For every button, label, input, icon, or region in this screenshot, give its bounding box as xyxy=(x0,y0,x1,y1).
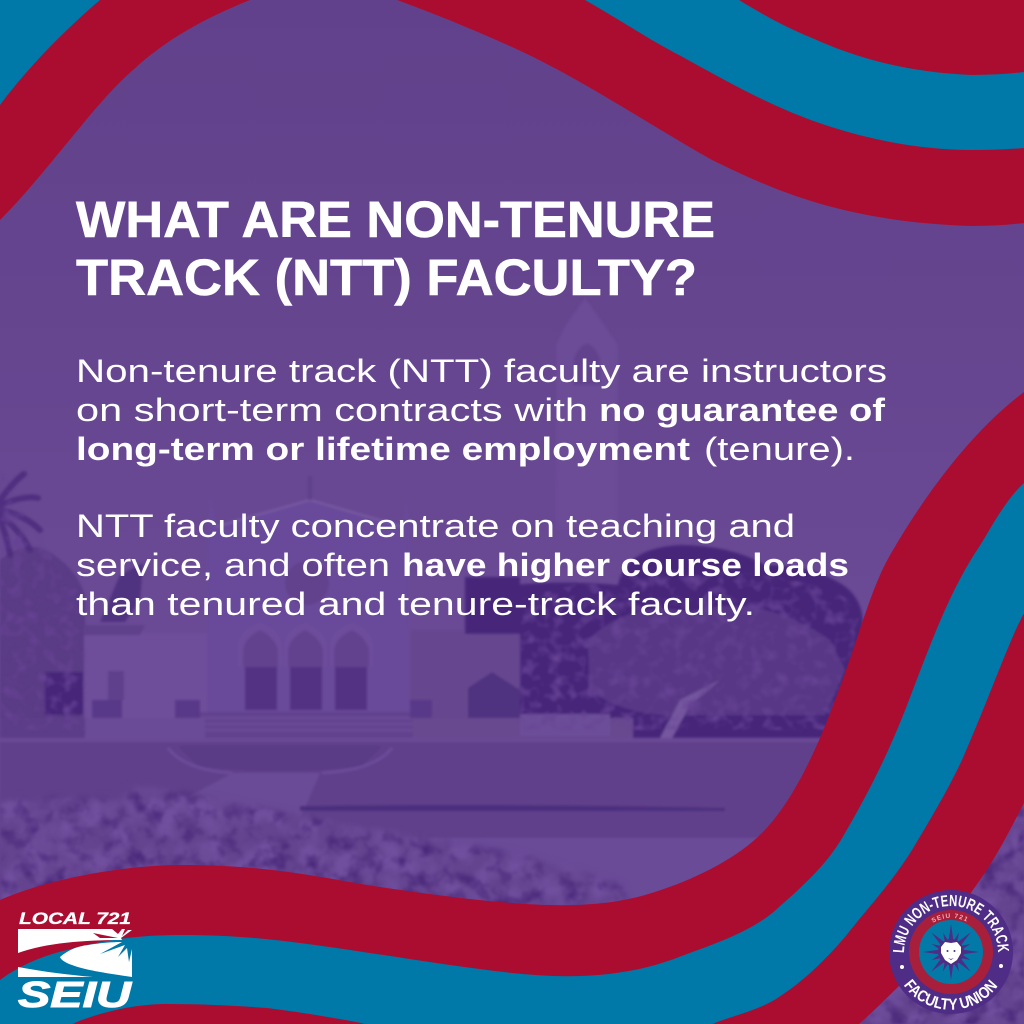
paragraph: teaching and course loads: service, and often xyxy=(76,547,390,583)
left trees xyxy=(0,547,85,735)
wave: top left teal corner xyxy=(0,0,100,105)
lawn xyxy=(0,738,880,908)
paragraph: definition of NTT faculty: (tenure). xyxy=(704,431,855,467)
right wing xyxy=(407,630,520,720)
wave: bottom red sliver xyxy=(72,1004,367,1024)
wave: top right teal band xyxy=(585,0,1024,150)
badge text: Faculty Union: FACULTY UNION xyxy=(904,978,998,1010)
logo flag: upper stripe xyxy=(18,929,132,953)
logo wordmark: SEIU: SEIU xyxy=(18,974,132,1015)
paragraph: teaching and course loads: NTT faculty concentrate on teaching and xyxy=(76,508,795,544)
paragraph: definition of NTT faculty: Non-tenure track (NTT) faculty are instructors xyxy=(76,353,887,389)
left wing xyxy=(84,633,207,718)
badge: LMU Non-Tenure Track Faculty Union xyxy=(889,890,1013,1014)
logo wordmark: local 721: LOCAL 721 xyxy=(19,910,131,928)
palm fronds xyxy=(0,474,40,555)
photo: building and trees xyxy=(0,298,880,908)
badge ring: red xyxy=(909,910,993,994)
photo: flower beds xyxy=(0,770,1024,1024)
wave: top left red band xyxy=(0,0,250,220)
front steps xyxy=(197,712,413,738)
logo flag: lower stripe xyxy=(18,942,132,977)
paved path xyxy=(150,773,320,835)
bell tower xyxy=(556,298,618,530)
photo: foliage texture on trees xyxy=(2,502,858,730)
badge dots xyxy=(900,964,1003,969)
church facade xyxy=(207,490,410,720)
paragraph: teaching and course loads: have higher course loads xyxy=(402,547,849,583)
paragraph: teaching and course loads: than tenured and tenure-track faculty. xyxy=(76,586,755,622)
badge sunburst xyxy=(923,924,979,980)
wave: top right red band xyxy=(397,0,1024,226)
right dark trees xyxy=(515,545,863,738)
title: TRACK (NTT) FACULTY? xyxy=(76,249,697,306)
paragraph: teaching and course loads xyxy=(76,508,849,622)
logo: SEIU Local 721 xyxy=(18,910,132,1015)
paragraph: definition of NTT faculty: on short-term contracts with xyxy=(76,392,588,428)
title: WHAT ARE NON-TENURE xyxy=(76,191,715,248)
wave: bottom red band xyxy=(0,392,1024,1024)
wave: top right red corner xyxy=(739,0,1024,75)
title xyxy=(76,191,715,306)
paragraph: definition of NTT faculty: no guarantee of xyxy=(599,392,885,428)
paragraph: definition of NTT faculty xyxy=(76,353,887,467)
badge text: SEIU 721: SEIU 721 xyxy=(932,913,968,922)
paragraph: definition of NTT faculty: long-term or lifetime employment xyxy=(76,431,690,467)
wave: bottom teal band xyxy=(0,483,1024,1024)
background: purple campus photo xyxy=(0,300,1024,1024)
right tree canopy xyxy=(588,606,845,716)
badge inner: teal xyxy=(919,920,983,984)
three arched doors xyxy=(238,623,282,667)
badge text: LMU Non-Tenure Track: LMU NON-TENURE TRACK xyxy=(892,894,1010,952)
badge icon: lion face xyxy=(941,942,961,964)
